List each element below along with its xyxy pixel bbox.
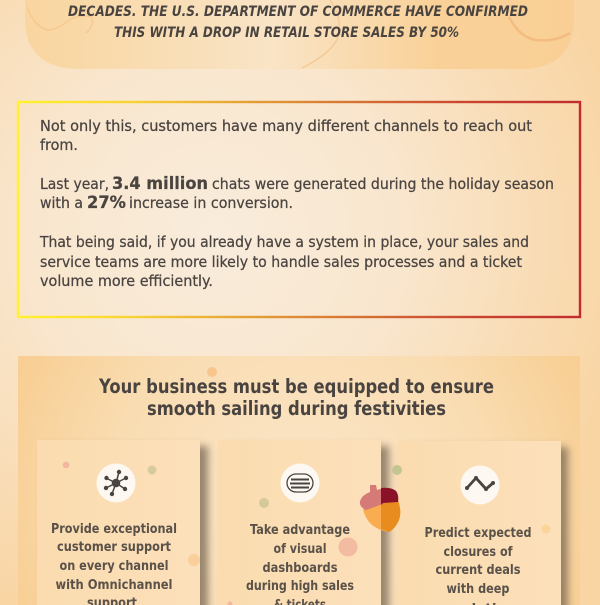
card 3 text: closures of — [444, 545, 513, 560]
paragraph text: 27% — [87, 193, 126, 213]
card 1 text: with Omnichannel — [56, 578, 172, 593]
panel: header banner — [25, 0, 574, 69]
paragraph text: volume more efficiently. — [40, 272, 213, 290]
icon: trend line — [460, 466, 500, 504]
paragraph text: 3.4 million — [112, 174, 208, 194]
card 1 text: on every channel — [60, 559, 168, 574]
card 2 — [218, 440, 389, 605]
header text — [68, 4, 528, 41]
card 2 text: Take advantage — [250, 523, 350, 538]
card 2 text: during high sales — [246, 579, 354, 594]
paragraph text: service teams are more likely to handle sales processes and a ticket — [40, 253, 522, 271]
paragraph text: from. — [40, 136, 78, 154]
card 1 text: Provide exceptional — [51, 522, 177, 537]
paragraph text: increase in conversion. — [129, 194, 293, 212]
paragraph text: Last year, — [40, 175, 109, 193]
card 2 text — [246, 523, 354, 605]
card 1 — [37, 440, 208, 605]
card 3 — [397, 441, 568, 605]
panel: equipped section — [18, 356, 580, 605]
card 3 text: with deep — [446, 582, 510, 597]
panel: statistics text box — [18, 102, 580, 317]
decorative dot — [207, 367, 217, 377]
card 2 text: of visual — [274, 542, 326, 557]
icon: network hub — [96, 464, 136, 502]
icon: list circle — [280, 464, 320, 502]
section heading: smooth sailing during festivities — [147, 397, 446, 420]
paragraph text: Not only this, customers have many different channels to reach out — [40, 117, 532, 135]
card 3 text: Predict expected — [424, 526, 532, 541]
card 2 text: dashboards — [262, 561, 338, 576]
card 3 text: current deals — [436, 563, 521, 578]
decorative dot — [392, 465, 402, 475]
paragraph text — [39, 117, 554, 290]
card 3 text — [424, 526, 532, 605]
paragraph text: chats were generated during the holiday season — [212, 175, 554, 193]
section heading: Your business must be equipped to ensure — [98, 375, 494, 398]
paragraph text: That being said, if you already have a system in place, your sales and — [39, 233, 529, 251]
header text: THIS WITH A DROP IN RETAIL STORE SALES BY 50% — [114, 25, 459, 41]
icon: acorn — [360, 485, 400, 532]
card 1 text: customer support — [57, 540, 171, 555]
section heading — [98, 375, 494, 420]
header text: DECADES. THE U.S. DEPARTMENT OF COMMERCE HAVE CONFIRMED — [68, 4, 528, 20]
card 1 text — [51, 522, 177, 605]
paragraph text: with a — [40, 194, 83, 212]
